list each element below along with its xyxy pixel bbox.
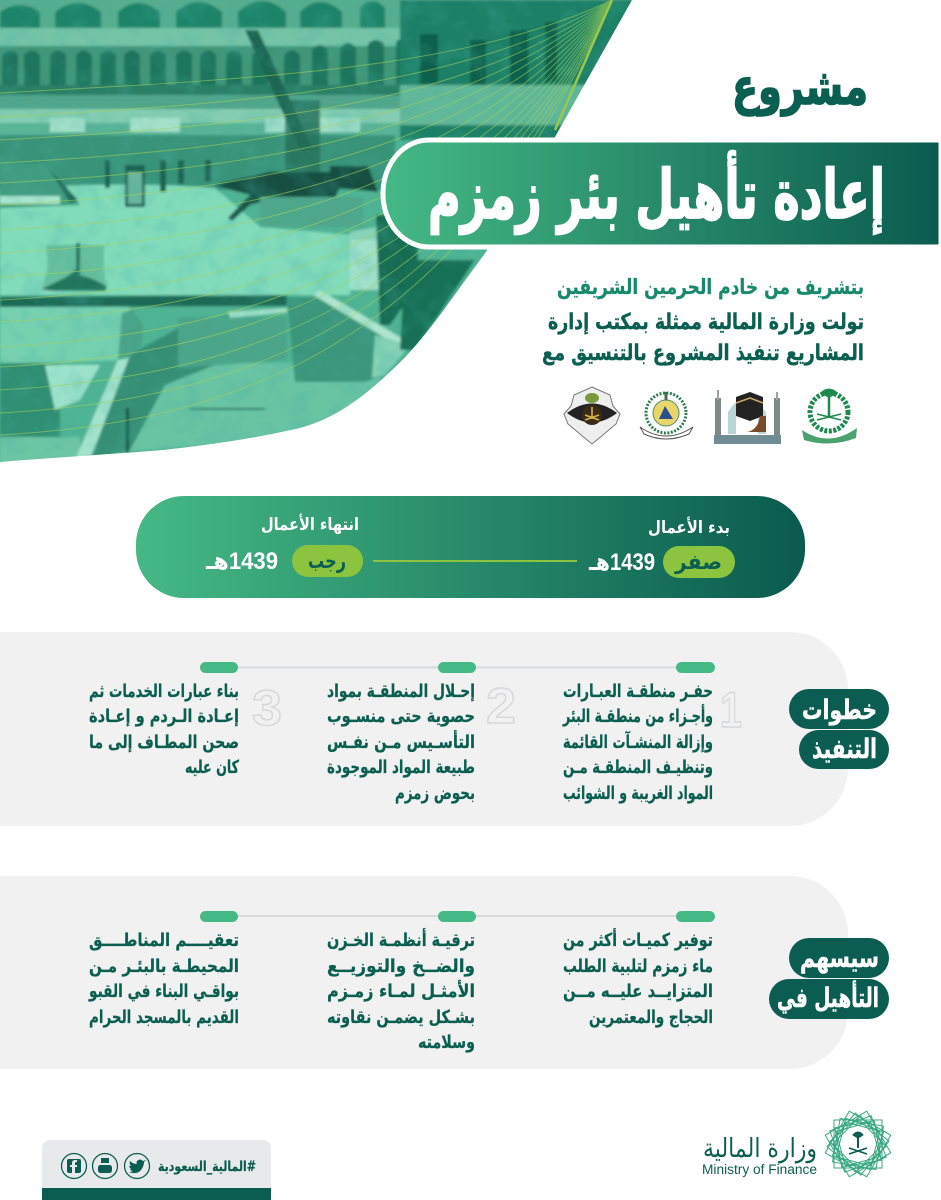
section label: rehabilitation contributes to: التأهيل في bbox=[777, 980, 879, 1014]
end year: 1439هـ bbox=[205, 548, 278, 575]
section label: implementation steps: خطوات bbox=[802, 695, 877, 726]
start label: بدء الأعمال bbox=[648, 517, 730, 538]
icon: security shield logo bbox=[564, 387, 620, 444]
timeline connector bbox=[373, 560, 577, 562]
photo: Zamzam well construction site bbox=[0, 0, 645, 470]
start month pill: صفر bbox=[674, 550, 722, 574]
benefit 1 marker bbox=[676, 911, 715, 922]
benefit 3 text: بواقـي البناء في القبو bbox=[88, 981, 239, 1002]
step 3 text: كان عليه bbox=[185, 757, 239, 778]
step 2 text: حصوية حتى منسـوب bbox=[327, 706, 475, 727]
footer: social media box bbox=[42, 1140, 271, 1200]
hashtag: #المالية_السعودية bbox=[158, 1159, 256, 1175]
step 1 marker bbox=[676, 662, 715, 673]
benefit 2 text: والضــخ والتوزيــع bbox=[327, 956, 475, 977]
benefit 2 text: الأمثـل لمـاء زمـزم bbox=[327, 980, 475, 1002]
section label: implementation steps: التنفيذ bbox=[812, 734, 877, 765]
pipe bbox=[0, 295, 287, 307]
benefit 2 text bbox=[327, 928, 475, 1053]
panel: implementation steps bbox=[0, 632, 848, 826]
step 2 text: بحوض زمزم bbox=[395, 783, 475, 804]
icon: Saudi emblem logo bbox=[802, 390, 857, 444]
benefit 2 text: ترقيـة أنظمـة الخـزن bbox=[327, 928, 475, 951]
concrete block bbox=[260, 197, 363, 227]
ministry name english: Ministry of Finance bbox=[702, 1162, 817, 1177]
intro text bbox=[542, 275, 864, 366]
section label: implementation steps bbox=[789, 689, 889, 769]
panel: rehabilitation benefits bbox=[0, 876, 848, 1069]
step 1 text: حفـر منطقـة العبـارات bbox=[563, 681, 713, 702]
number 1: 1 bbox=[720, 682, 742, 738]
intro text: تولت وزارة المالية ممثلة بمكتب إدارة bbox=[548, 310, 864, 335]
step 3 text: إعـادة الـردم و إعـادة bbox=[89, 706, 239, 727]
heading: project: مشروع bbox=[732, 58, 868, 117]
step 3 text: صحن المطـاف إلى ما bbox=[89, 732, 239, 753]
section label: rehabilitation contributes to bbox=[769, 938, 889, 1019]
lower areas bbox=[0, 307, 130, 365]
step 3 text bbox=[89, 681, 239, 778]
benefit 2 text: وسلامته bbox=[418, 1032, 475, 1053]
icon: twitter bbox=[124, 1154, 150, 1178]
small wall bbox=[42, 245, 107, 290]
start year: 1439هـ bbox=[588, 549, 655, 576]
step 1 text: وأجـزاء من منطقـة البئر bbox=[562, 704, 713, 727]
step 3 marker bbox=[200, 662, 238, 673]
people bbox=[105, 160, 211, 207]
number 3: 3 bbox=[252, 680, 282, 736]
panel: timeline bbox=[136, 496, 805, 598]
benefit 3 text: المحيطـة بالبئـر مـن bbox=[89, 956, 239, 977]
benefit 1 text: توفير كميـات أكثر من bbox=[563, 928, 713, 951]
benefit 3 text bbox=[88, 930, 239, 1028]
step 1 text: وتنظيـف المنطقـة مـن bbox=[563, 757, 713, 778]
end month pill bbox=[292, 545, 363, 577]
benefit 1 text: الحجاج والمعتمرين bbox=[589, 1007, 713, 1028]
benefit 3 text: القديم بالمسجد الحرام bbox=[89, 1007, 239, 1028]
section label: rehabilitation contributes to: سيسهم bbox=[800, 943, 879, 974]
crane bbox=[245, 30, 312, 150]
benefit 1 text bbox=[563, 928, 713, 1028]
icon: civil defense logo bbox=[640, 392, 693, 439]
step 3 text: بناء عبارات الخدمات ثم bbox=[89, 681, 239, 702]
ministry name arabic: وزارة المالية bbox=[703, 1134, 817, 1164]
step 2 text: طبيعة المواد الموجودة bbox=[327, 757, 475, 778]
benefit 3 marker bbox=[200, 911, 238, 922]
number 2: 2 bbox=[486, 678, 516, 734]
benefit 3 text: تعقيــــم المناطــــق bbox=[89, 930, 239, 951]
step 1 text: وإزالة المنشـآت القائمة bbox=[563, 730, 713, 753]
intro text: المشاريع تنفيذ المشروع بالتنسيق مع bbox=[542, 341, 864, 366]
start month pill bbox=[663, 546, 735, 578]
step 1 text: المواد الغريبة و الشوائب bbox=[563, 783, 713, 804]
title banner bbox=[383, 140, 941, 247]
benefit 2 marker bbox=[438, 911, 476, 922]
plaza bbox=[0, 184, 350, 295]
ministry of finance logo bbox=[702, 1111, 891, 1177]
photo texture bbox=[0, 0, 640, 470]
benefit 2 text: بشـكل يضمـن نقاوته bbox=[327, 1007, 475, 1028]
icon: facebook bbox=[62, 1154, 86, 1178]
benefit 1 text: المتزايــد عليــه مــن bbox=[563, 981, 713, 1002]
step 2 text: التأسـيس مـن نفـس bbox=[327, 730, 475, 753]
icon: Kaaba logo bbox=[714, 390, 781, 444]
step 1 text bbox=[562, 681, 713, 804]
step 2 text: إحـلال المنطقـة بمواد bbox=[327, 681, 475, 702]
end label: انتهاء الأعمال bbox=[261, 514, 359, 535]
icon: rosette emblem bbox=[825, 1111, 891, 1177]
end month pill: رجب bbox=[308, 549, 346, 573]
step 2 marker bbox=[438, 662, 476, 673]
decorative curved lines bbox=[0, 0, 612, 435]
icon: youtube bbox=[92, 1154, 118, 1178]
benefit 1 text: ماء زمزم لتلبية الطلب bbox=[563, 956, 713, 977]
step 2 text bbox=[327, 681, 475, 804]
intro text: بتشريف من خادم الحرمين الشريفين bbox=[557, 275, 864, 299]
